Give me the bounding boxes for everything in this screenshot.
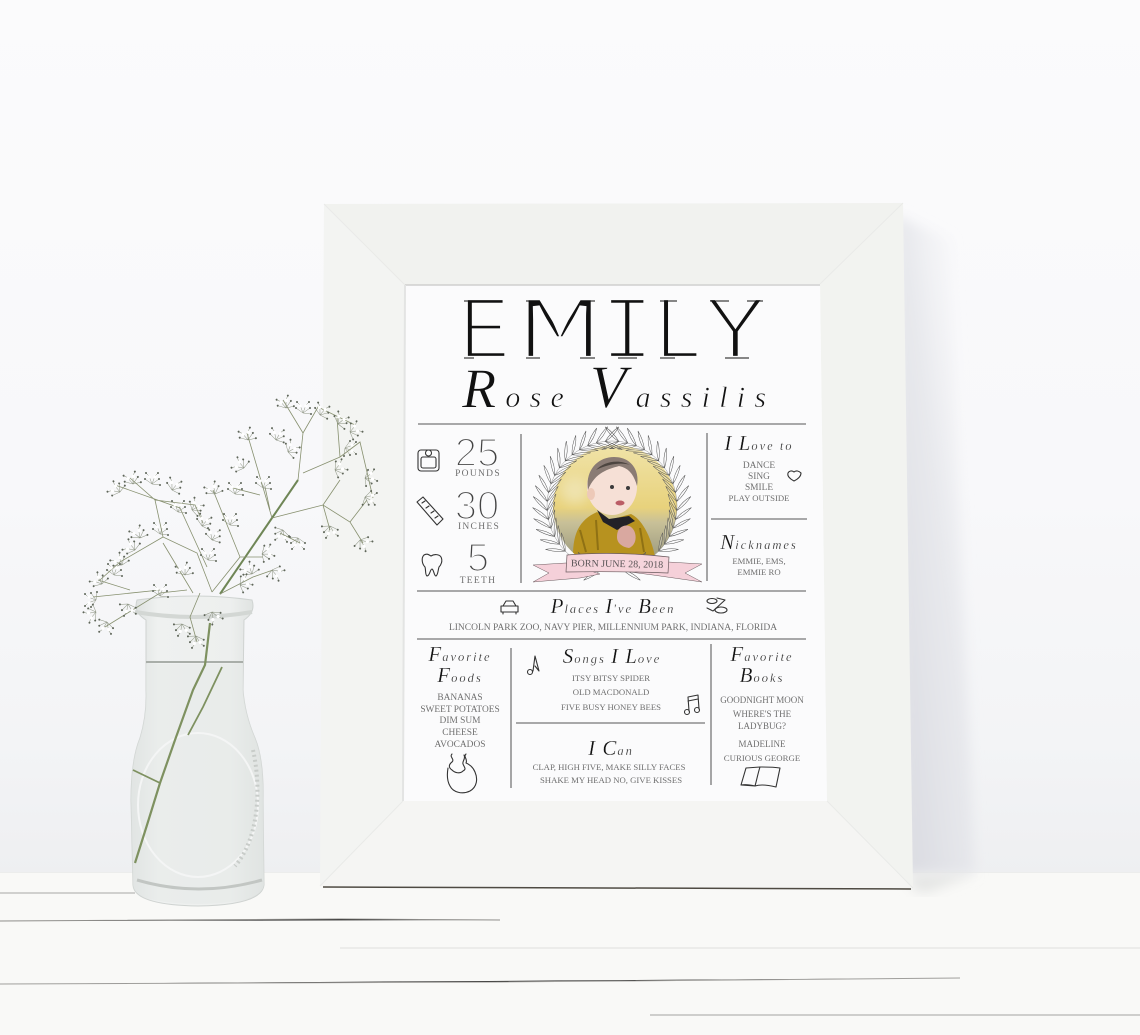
panel: measurements: [417, 431, 501, 586]
icon: tooth: [422, 554, 442, 576]
heading: I Love to: [723, 431, 794, 455]
icon: ruler: [417, 497, 443, 525]
heading: Places I've Been: [550, 594, 675, 618]
list: PLAY OUTSIDE: [729, 493, 789, 503]
panel: Nicknames: [719, 530, 798, 577]
list: SWEET POTATOES: [420, 705, 500, 715]
panel: I Can: [533, 736, 686, 785]
list: [561, 673, 661, 712]
heading: Favorite: [427, 642, 492, 666]
list: FIVE BUSY HONEY BEES: [561, 702, 661, 712]
teeth number: 5: [467, 536, 489, 580]
pink ribbon banner: [533, 553, 702, 582]
list: CHEESE: [442, 728, 478, 738]
list: CLAP, HIGH FIVE, MAKE SILLY FACES: [533, 762, 686, 772]
icon: music note: [528, 656, 539, 674]
flower clusters: [276, 395, 294, 411]
title: EMILY: L: [652, 282, 704, 386]
white picture frame: [320, 203, 913, 889]
list: DIM SUM: [440, 716, 481, 726]
title: EMILY: E: [459, 282, 511, 386]
panel: Places I've Been: [449, 594, 777, 633]
list: EMMIE RO: [737, 567, 781, 577]
portrait photo with wreath: [532, 426, 702, 583]
icon: music notes: [684, 695, 700, 714]
list: [533, 762, 686, 785]
photo of baby: [553, 445, 677, 556]
list: SING: [748, 472, 770, 482]
panel: Favorite Foods: [420, 642, 500, 793]
list: SMILE: [745, 483, 773, 493]
list: GOODNIGHT MOON: [720, 695, 804, 705]
shelf: [0, 872, 1140, 1035]
list: WHERE'S THE: [733, 709, 792, 719]
frame shadow: [895, 215, 975, 873]
submerged stems: [135, 623, 210, 863]
print paper: [403, 284, 827, 801]
teeth label: TEETH: [460, 576, 496, 586]
heading: Nicknames: [719, 530, 798, 554]
glass milk bottle: [131, 596, 264, 906]
places list: LINCOLN PARK ZOO, NAVY PIER, MILLENNIUM PARK, INDIANA, FLORIDA: [449, 623, 777, 633]
list: DANCE: [743, 461, 775, 471]
icon: scale: [418, 450, 439, 471]
panel: Songs I Love: [528, 644, 700, 714]
title: EMILY: M: [516, 283, 603, 386]
title: EMILY: [459, 282, 767, 386]
list: [729, 461, 789, 503]
heading: Foods: [436, 663, 483, 687]
list: OLD MACDONALD: [573, 687, 649, 697]
icon: open book: [741, 767, 780, 787]
list: [720, 695, 804, 763]
pounds label: POUNDS: [455, 469, 501, 479]
list: EMMIE, EMS,: [732, 556, 786, 566]
heading: [729, 642, 794, 687]
panel: Favorite Books: [720, 642, 804, 787]
list: LADYBUG?: [738, 721, 786, 731]
inches label: INCHES: [458, 522, 500, 532]
list: ITSY BITSY SPIDER: [572, 673, 650, 683]
pounds number: 25: [455, 431, 499, 475]
list: AVOCADOS: [435, 740, 485, 750]
title: EMILY: I: [600, 283, 655, 386]
heading: Books: [740, 663, 784, 687]
baby's breath flowers: [82, 395, 378, 863]
title: EMILY: Y: [704, 283, 767, 386]
panel: I Love to: [723, 431, 801, 503]
list: BANANAS: [437, 693, 483, 703]
heading: Favorite: [729, 642, 794, 666]
icon: car: [501, 601, 518, 614]
icon: shoes: [707, 598, 727, 613]
list: [420, 693, 500, 750]
heading: I Can: [587, 736, 634, 760]
list: MADELINE: [738, 739, 786, 749]
wreath: [532, 426, 692, 583]
grid lines: [417, 424, 807, 788]
icon: bib: [447, 754, 477, 793]
icon: heart: [788, 471, 801, 481]
birth date: BORN JUNE 28, 2018: [571, 558, 663, 571]
heading: [427, 642, 492, 687]
list: CURIOUS GEORGE: [724, 753, 800, 763]
heading: Songs I Love: [563, 644, 661, 668]
list: SHAKE MY HEAD NO, GIVE KISSES: [540, 775, 682, 785]
green stems: [220, 480, 298, 594]
subtitle: Rose Vassilis: R ose V assilis: [461, 354, 766, 420]
list: [732, 556, 786, 577]
inches number: 30: [455, 484, 499, 528]
